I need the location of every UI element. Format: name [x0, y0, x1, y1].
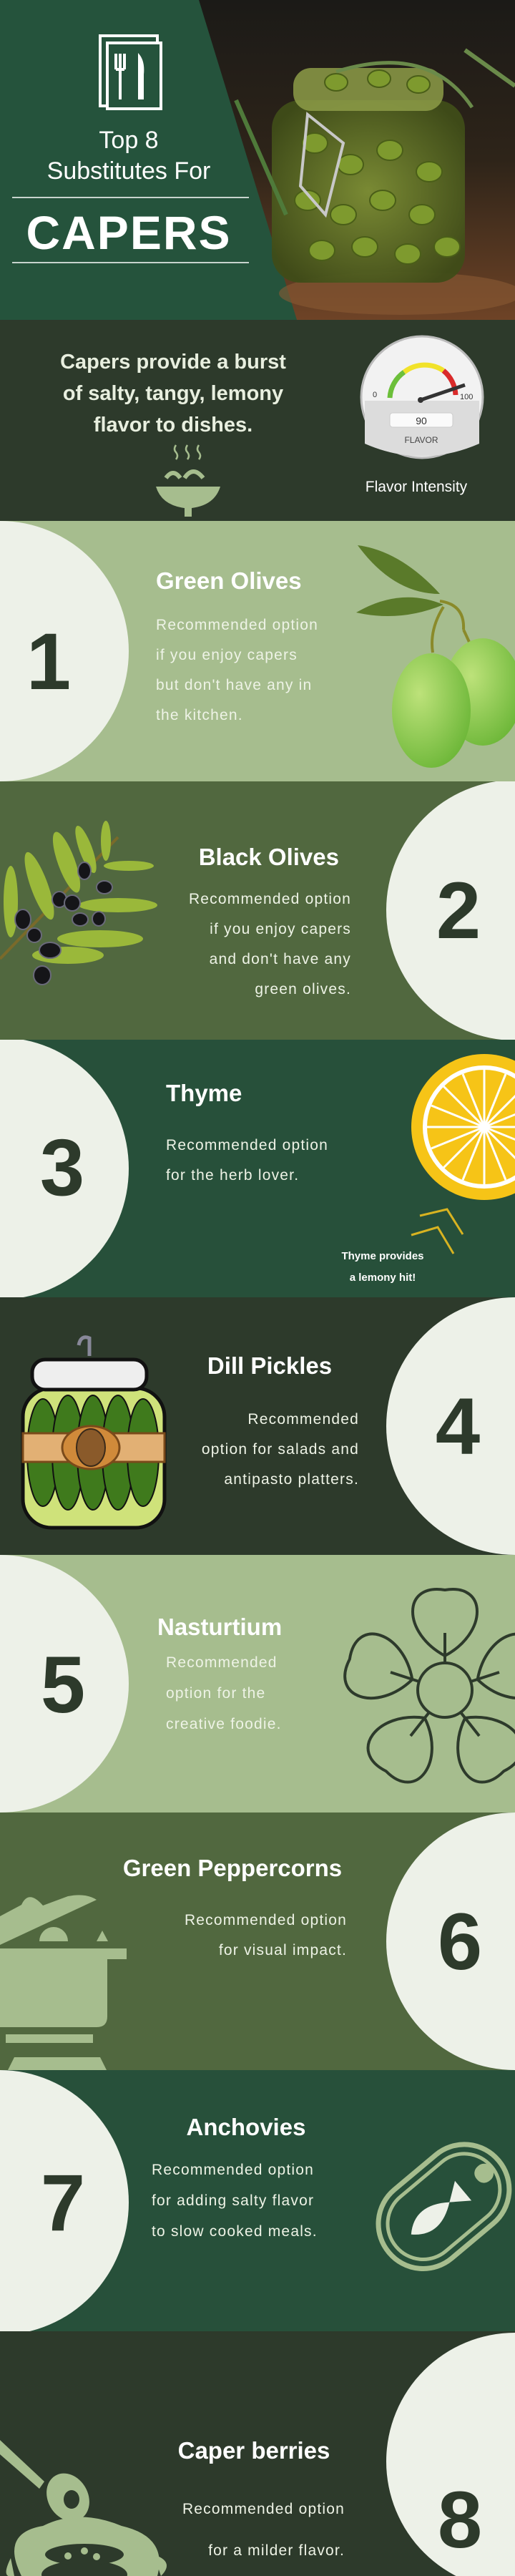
heading: black olives: Black Olives	[199, 844, 339, 870]
icon: menu book with fork and knife	[100, 36, 161, 109]
icon: lemon slice	[411, 1054, 515, 1200]
text block: Recommended option	[166, 1137, 328, 1153]
text block: for a milder flavor.	[208, 2542, 345, 2559]
icon: olive branch	[0, 821, 157, 985]
title: CAPERS	[26, 206, 232, 259]
heading: caper berries: Caper berries	[178, 2437, 330, 2464]
heading: green peppercorns: Green Peppercorns	[123, 1855, 342, 1881]
callout: thyme provides a lemony hit: Thyme provides	[341, 1250, 424, 1262]
text block: to slow cooked meals.	[152, 2223, 318, 2240]
text block: for visual impact.	[219, 1942, 347, 1958]
text block	[185, 1912, 347, 1958]
heading: anchovies: Anchovies	[187, 2114, 305, 2140]
icon: steaming bowl	[156, 445, 220, 517]
number circle 8	[386, 2333, 515, 2576]
number circle 1	[0, 521, 129, 781]
text block: for the herb lover.	[166, 1167, 299, 1184]
number circle 1: 1	[26, 617, 71, 706]
panel: 8 caper berries	[0, 2331, 515, 2576]
number circle 7	[0, 2070, 129, 2335]
heading: nasturtium: Nasturtium	[157, 1614, 282, 1640]
title: Substitutes For	[47, 157, 210, 185]
number circle 2	[386, 780, 515, 1040]
text block: green olives.	[255, 981, 351, 997]
chart: flavor gauge: 0	[373, 391, 377, 399]
text block: but don't have any in	[156, 677, 312, 693]
text block: for adding salty flavor	[152, 2192, 314, 2209]
text block	[152, 2162, 318, 2240]
chart: flavor gauge: FLAVOR	[404, 435, 438, 445]
text block: intro: flavor to dishes.	[94, 414, 252, 436]
icon: cooking pot on stove	[0, 1895, 127, 2072]
panel: 1 green olives	[0, 521, 515, 781]
icon: pickle jar	[23, 1337, 165, 1528]
text block: intro: Capers provide a burst	[60, 351, 286, 374]
number circle 6	[386, 1813, 515, 2070]
text block: antipasto platters.	[224, 1471, 359, 1488]
panel: intro	[0, 320, 515, 521]
number circle 3	[0, 1038, 129, 1299]
panel: 2 black olives	[0, 780, 515, 1040]
title: Top 8	[99, 127, 159, 154]
arrow: chevrons	[411, 1209, 463, 1254]
text block: Recommended option	[156, 617, 318, 633]
number circle 5	[0, 1555, 129, 1813]
text block: Recommended option	[152, 2162, 314, 2178]
text block: Recommended option	[185, 1912, 347, 1928]
text block: Recommended	[166, 1654, 278, 1671]
panel: 3 thyme	[0, 1038, 515, 1299]
text block	[182, 2501, 345, 2559]
number circle 7: 7	[41, 2158, 85, 2248]
number circle 4: 4	[436, 1382, 480, 1471]
text block: if you enjoy capers	[156, 647, 298, 663]
panel: 6 green peppercorns	[0, 1813, 515, 2072]
text block: Recommended option	[182, 2501, 345, 2517]
text block: option for salads and	[202, 1441, 359, 1458]
icon: spoon and sugar bowl	[0, 2440, 167, 2576]
panel: 7 anchovies	[0, 2070, 515, 2335]
number circle 6: 6	[438, 1897, 482, 1986]
text block: intro	[60, 351, 286, 436]
icon: anchovy tin	[376, 2142, 512, 2271]
text block: and don't have any	[210, 951, 351, 967]
panel: 4 dill pickles	[0, 1297, 515, 1555]
text block: if you enjoy capers	[210, 921, 351, 937]
text block	[189, 891, 351, 997]
number circle 4	[386, 1297, 515, 1555]
text block: Recommended option	[189, 891, 351, 907]
number circle 8: 8	[438, 2475, 482, 2565]
title	[12, 127, 249, 263]
heading: dill pickles: Dill Pickles	[207, 1352, 332, 1379]
text block: Recommended	[247, 1411, 359, 1428]
number circle 5: 5	[41, 1640, 85, 1729]
text block	[166, 1654, 282, 1732]
text block: the kitchen.	[156, 707, 243, 723]
text block	[166, 1139, 326, 1180]
text block: creative foodie.	[166, 1716, 282, 1732]
heading: green olives: Green Olives	[156, 567, 302, 594]
callout: thyme provides a lemony hit	[341, 1250, 424, 1284]
text block	[202, 1411, 359, 1488]
heading: thyme: Thyme	[166, 1080, 242, 1106]
icon: green olives	[356, 545, 515, 768]
text block	[156, 617, 318, 723]
number circle 2: 2	[436, 866, 481, 955]
panel: header	[0, 0, 515, 320]
icon: flower outline	[339, 1589, 515, 1790]
chart: flavor gauge	[361, 336, 483, 458]
number circle 3: 3	[40, 1123, 84, 1212]
label: flavor intensity: Flavor Intensity	[366, 479, 468, 495]
text block: option for the	[166, 1685, 265, 1702]
chart: flavor gauge: 90	[416, 415, 427, 426]
text block: intro: of salty, tangy, lemony	[63, 382, 283, 405]
chart: flavor gauge: 100	[460, 393, 473, 401]
panel: 5 nasturtium	[0, 1555, 515, 1813]
photo: caper jar	[199, 0, 515, 320]
callout: thyme provides a lemony hit: a lemony hit!	[350, 1272, 416, 1284]
